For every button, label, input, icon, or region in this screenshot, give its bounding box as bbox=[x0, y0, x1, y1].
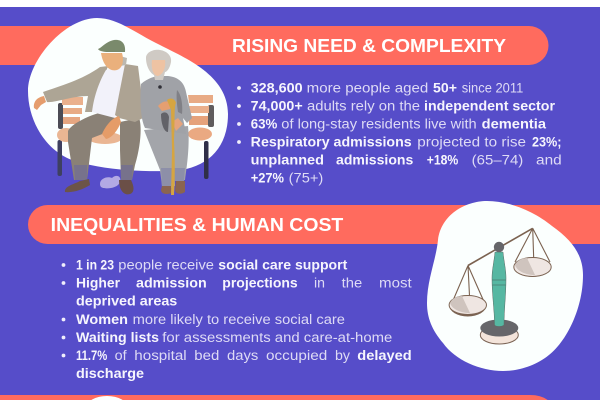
text block: rising need bullets: 23%; bbox=[532, 134, 562, 150]
text block: rising need bullets: of long-stay residents live with bbox=[281, 116, 477, 132]
text block: inequalities bullets bbox=[62, 257, 412, 381]
text block: rising need bullets: 50+ bbox=[433, 80, 457, 96]
text block: rising need bullets: +18% bbox=[427, 152, 458, 168]
bench bbox=[57, 95, 214, 179]
heading banner: inequalities bbox=[28, 205, 600, 244]
text block: inequalities bullets: 1 in 23 bbox=[76, 257, 114, 272]
text block: inequalities bullets: deprived areas bbox=[76, 294, 177, 308]
scales beam and strings bbox=[452, 228, 550, 306]
text block: rising need bullets: more people aged bbox=[307, 80, 428, 96]
text block: rising need bullets bbox=[237, 80, 562, 186]
heading: inequalities and human cost: INEQUALITIES & HUMAN COST bbox=[51, 214, 344, 235]
white blob top (cropped) bbox=[86, 396, 128, 400]
illustration: balance scales bbox=[427, 201, 583, 371]
text block: inequalities bullets: discharge bbox=[76, 366, 145, 381]
text block: inequalities bullets: the bbox=[342, 275, 362, 290]
panel: next section banner (cropped) bbox=[0, 395, 549, 400]
text block: rising need bullets: projected to rise bbox=[417, 134, 526, 150]
text block: rising need bullets: 63% bbox=[251, 116, 277, 132]
text block: inequalities bullets: admission bbox=[136, 275, 207, 290]
text block: rising need bullets: +27% bbox=[251, 170, 284, 186]
text block: inequalities bullets: more likely to receive social care bbox=[133, 312, 345, 327]
text block: rising need bullets: unplanned bbox=[251, 152, 324, 168]
scales column bbox=[492, 242, 506, 326]
heading: rising need and complexity: RISING NEED & COMPLEXITY bbox=[232, 35, 507, 56]
text block: rising need bullets: adults rely on the bbox=[307, 98, 420, 114]
scales base bbox=[480, 320, 518, 344]
text block: inequalities bullets: people receive bbox=[118, 257, 214, 272]
text block: rising need bullets: admissions bbox=[336, 152, 413, 168]
text block: inequalities bullets: hospital bbox=[134, 348, 187, 363]
dog shape bbox=[100, 176, 120, 188]
woman bbox=[140, 50, 192, 195]
text block: inequalities bullets: in bbox=[314, 275, 325, 290]
heading banner: rising need bbox=[0, 26, 548, 65]
text block: inequalities bullets: occupied bbox=[266, 348, 327, 363]
text block: inequalities bullets: social care support bbox=[218, 257, 348, 272]
text block: rising need bullets: (65–74) bbox=[472, 152, 523, 168]
text block: rising need bullets: Respiratory admissions bbox=[251, 134, 412, 150]
text block: rising need bullets: dementia bbox=[482, 116, 547, 132]
text block: inequalities bullets: bed bbox=[194, 348, 219, 363]
text block: rising need bullets: and bbox=[536, 152, 562, 168]
text block: rising need bullets: 328,600 bbox=[251, 80, 303, 96]
text block: inequalities bullets: Waiting lists bbox=[76, 330, 159, 345]
left pan bbox=[449, 296, 486, 317]
panel: inequalities and human cost bbox=[28, 205, 600, 381]
text block: rising need bullets: independent sector bbox=[424, 98, 556, 114]
white blob behind scales bbox=[427, 201, 583, 371]
text block: inequalities bullets: by bbox=[335, 348, 350, 363]
white blob behind couple bbox=[28, 18, 228, 171]
text block: inequalities bullets: of bbox=[115, 348, 127, 363]
text block: inequalities bullets: most bbox=[379, 275, 412, 290]
illustration: older couple on a bench bbox=[28, 18, 228, 195]
text block: inequalities bullets: delayed bbox=[357, 348, 412, 363]
right pan bbox=[514, 258, 551, 277]
text block: inequalities bullets: projections bbox=[222, 275, 298, 290]
text block: rising need bullets: 74,000+ bbox=[251, 98, 303, 114]
text block: rising need bullets: since 2011 bbox=[462, 80, 523, 96]
man bbox=[34, 40, 143, 194]
text block: inequalities bullets: Women bbox=[76, 312, 128, 327]
text block: inequalities bullets: for assessments and care-at-home bbox=[162, 330, 392, 345]
panel: rising need and complexity bbox=[0, 26, 562, 186]
text block: inequalities bullets: Higher bbox=[76, 275, 121, 290]
text block: inequalities bullets: days bbox=[227, 348, 259, 363]
text block: inequalities bullets: 11.7% bbox=[76, 348, 107, 363]
text block: rising need bullets: (75+) bbox=[289, 170, 323, 186]
